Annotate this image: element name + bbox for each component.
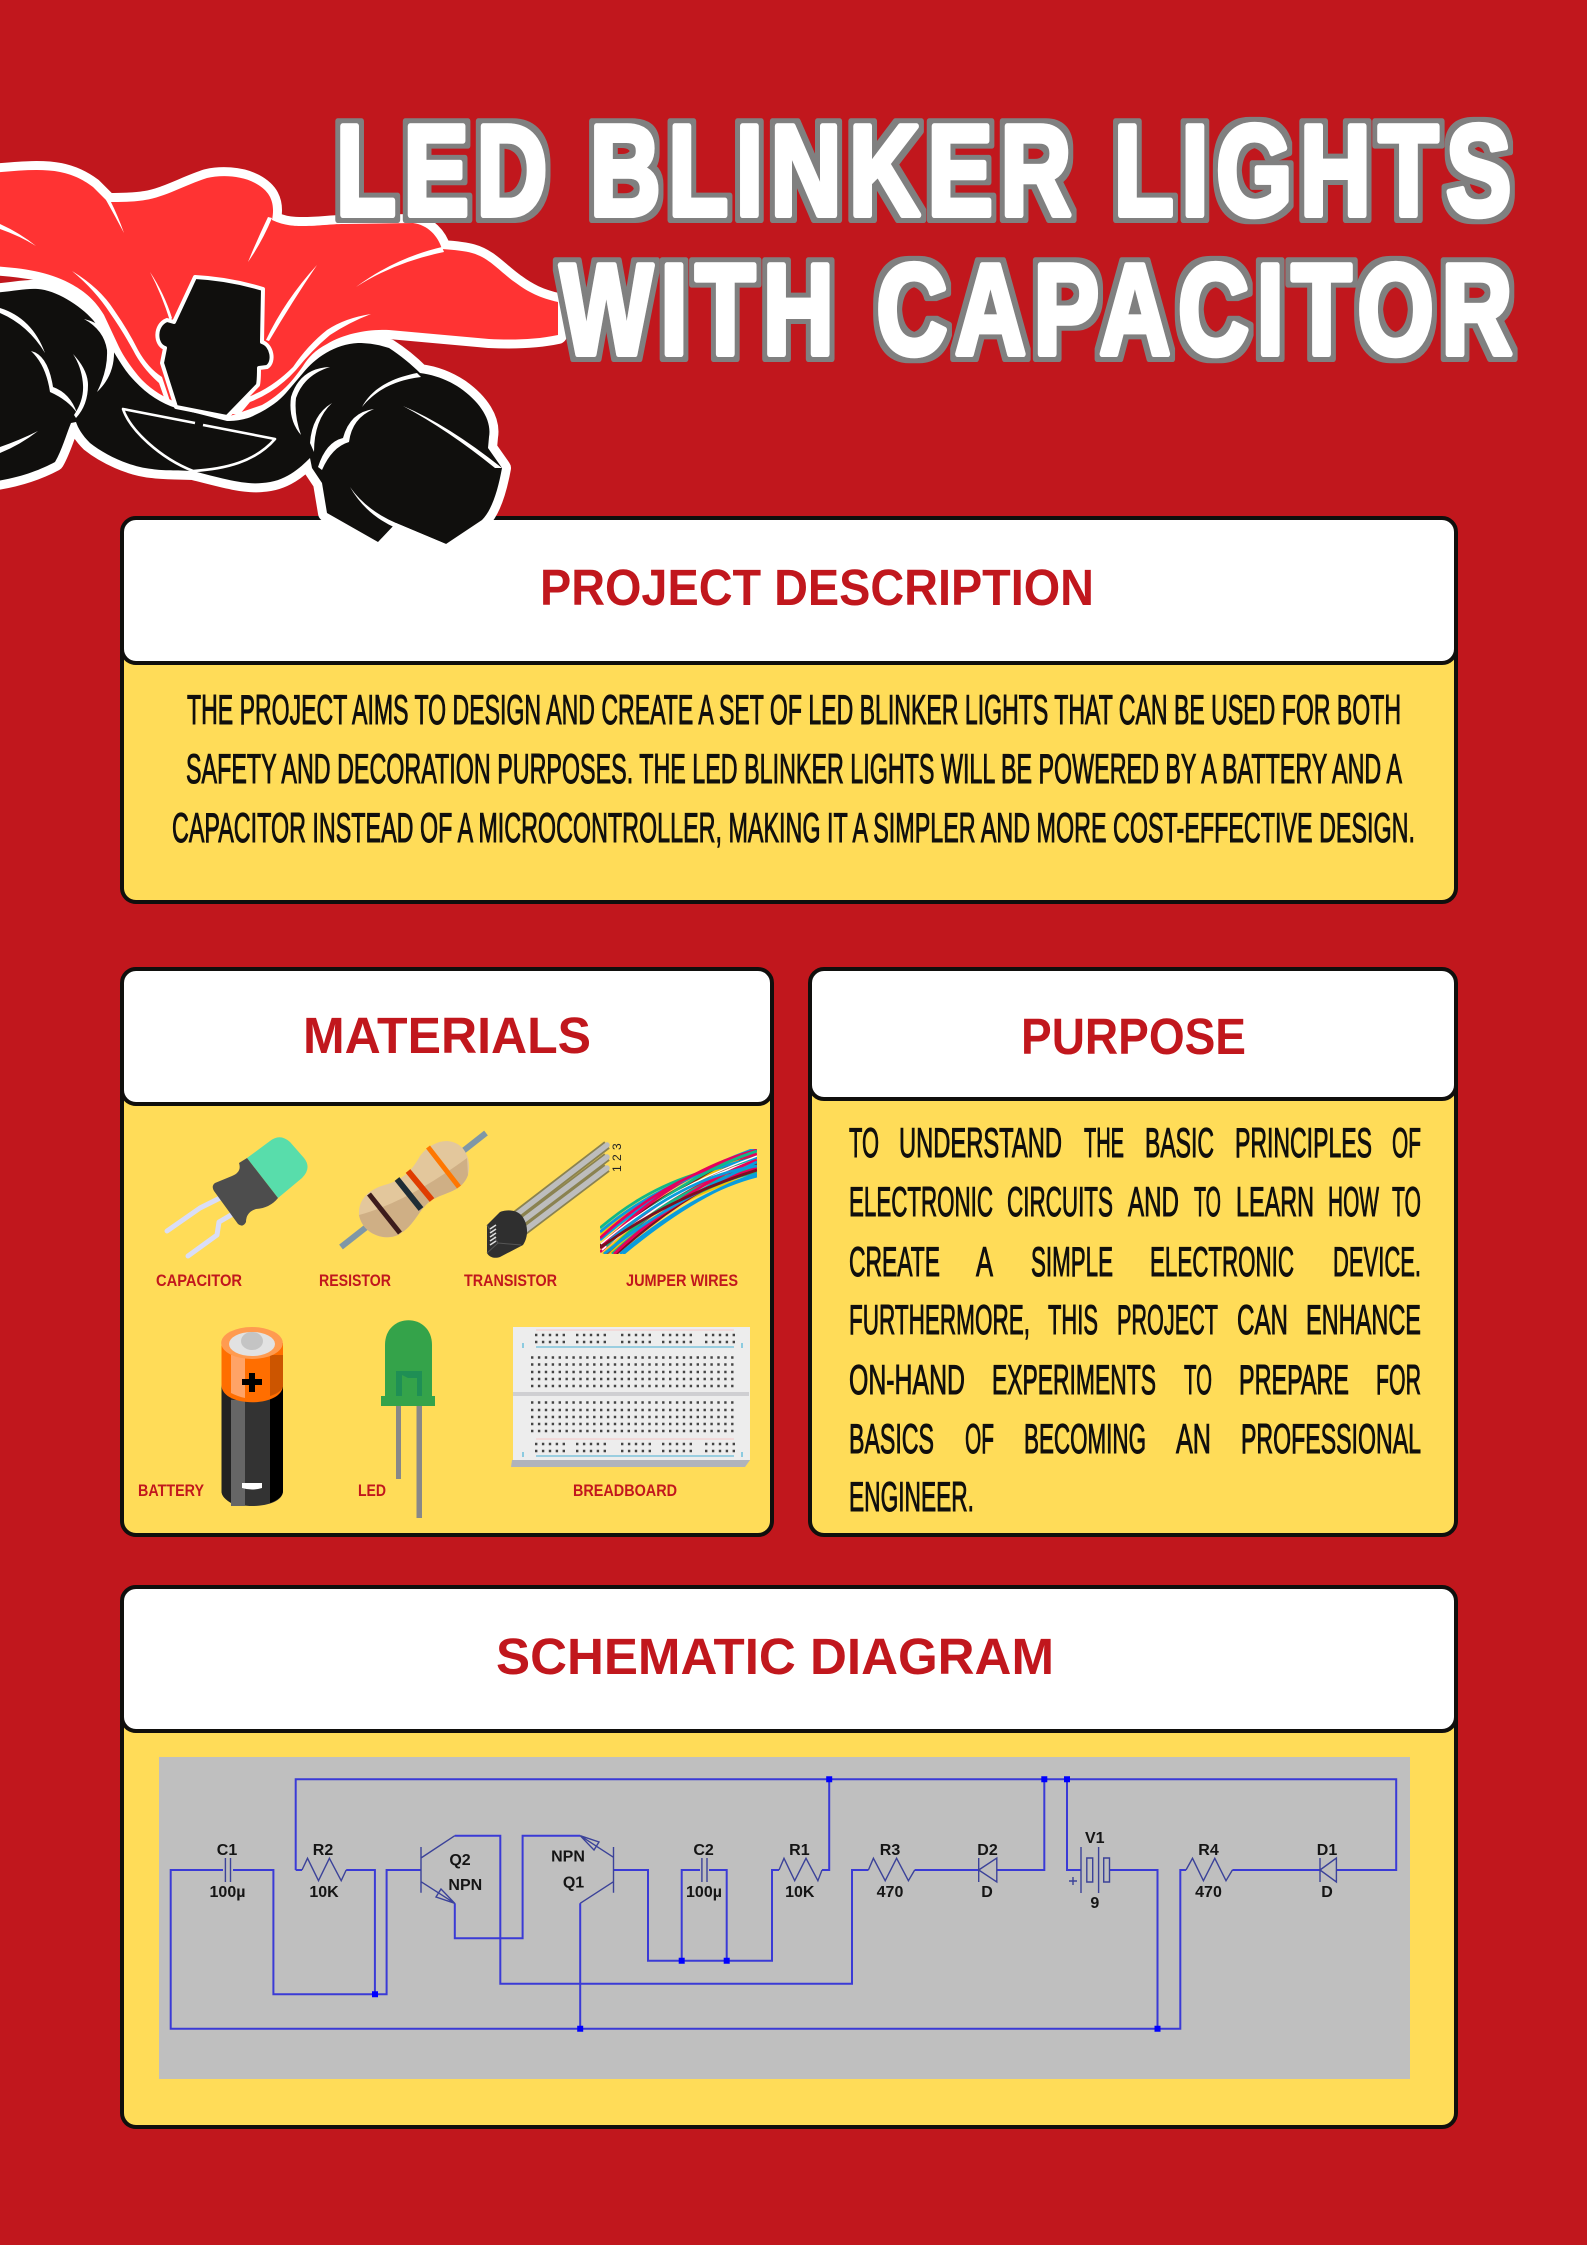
text block: purpose: PROJECT (1117, 1296, 1218, 1343)
text block: purpose (849, 1119, 1421, 1520)
text block: purpose: DEVICE. (1333, 1238, 1421, 1285)
icon: capacitor (167, 1137, 308, 1256)
chart: circuit schematic: 100µ (686, 1884, 722, 1901)
heading: project description: PROJECT DESCRIPTION (540, 559, 1094, 616)
text block: purpose: PRINCIPLES (1235, 1119, 1372, 1166)
panel: purpose (810, 969, 1456, 1535)
icon: resistor (341, 1133, 486, 1247)
icon: breadboard (511, 1327, 750, 1467)
text block: purpose: TO (1184, 1356, 1212, 1403)
text block: purpose: TO (1194, 1178, 1221, 1225)
label: transistor: TRANSISTOR (464, 1271, 557, 1290)
text block: purpose: ENGINEER. (849, 1473, 974, 1520)
text block: purpose: ENHANCE (1306, 1296, 1421, 1343)
chart: circuit schematic: 470 (1195, 1884, 1222, 1901)
cape folds (0, 200, 444, 414)
text block: purpose: LEARN (1236, 1178, 1314, 1225)
text block: purpose: FURTHERMORE, (849, 1296, 1030, 1343)
chart: circuit schematic: R3 (880, 1842, 900, 1859)
text block: purpose: FOR (1376, 1356, 1421, 1403)
text block: purpose: OF (965, 1415, 994, 1462)
text block: purpose: PREPARE (1239, 1356, 1349, 1403)
chart: circuit schematic: Q1 (563, 1875, 584, 1892)
chart: circuit schematic: R4 (1198, 1842, 1219, 1859)
text block: purpose: AND (1128, 1178, 1179, 1225)
icon: transistor: 1 (610, 1165, 624, 1172)
icon: transistor: 2 (610, 1154, 624, 1161)
chart: circuit schematic: 10K (785, 1884, 815, 1901)
wires (171, 1779, 1396, 2029)
icon: jumper wires (600, 1148, 757, 1254)
heading: materials: MATERIALS (303, 1007, 591, 1064)
icon: transistor: 3 (610, 1143, 624, 1150)
chart: circuit schematic (159, 1757, 1410, 2079)
chart: circuit schematic: Q2 (449, 1852, 471, 1869)
text block: purpose: SIMPLE (1031, 1238, 1113, 1285)
chart: circuit schematic: R2 (313, 1842, 333, 1859)
chart: circuit schematic: D1 (1317, 1842, 1337, 1859)
text block: purpose: BASIC (1145, 1119, 1214, 1166)
text block: purpose: AN (1176, 1415, 1211, 1462)
chart: circuit schematic: 9 (1090, 1895, 1099, 1912)
label: capacitor: CAPACITOR (156, 1271, 242, 1290)
icon: LED (381, 1320, 435, 1518)
text block: purpose: HOW (1328, 1178, 1379, 1225)
label: jumper wires: JUMPER WIRES (626, 1271, 738, 1290)
cape outline (0, 170, 558, 416)
body (0, 289, 502, 544)
component labels: C1 (217, 1842, 237, 1859)
chart: circuit schematic: NPN (551, 1849, 585, 1866)
text block: purpose: A (976, 1238, 993, 1285)
text block: purpose: BASICS (849, 1415, 934, 1462)
text block: purpose: EXPERIMENTS (992, 1356, 1156, 1403)
chart: circuit schematic: 100µ (210, 1884, 245, 1901)
heading: purpose: PURPOSE (1021, 1008, 1246, 1065)
title (336, 99, 1520, 382)
chest lines (123, 409, 275, 471)
chart: circuit schematic: 10K (309, 1884, 339, 1901)
chart: circuit schematic: V1 (1085, 1830, 1105, 1847)
chart: circuit schematic: R1 (789, 1842, 810, 1859)
text block: purpose: BECOMING (1024, 1415, 1146, 1462)
text block: purpose: CIRCUITS (1007, 1178, 1113, 1225)
label: resistor: RESISTOR (319, 1271, 391, 1290)
panel: project description (122, 518, 1456, 902)
text block: purpose: CAN (1237, 1296, 1288, 1343)
text block: purpose: OF (1392, 1119, 1421, 1166)
label: battery: BATTERY (138, 1481, 205, 1500)
icon: transistor (487, 1143, 624, 1258)
chart: circuit schematic: 470 (877, 1884, 903, 1901)
text block: purpose: ELECTRONIC (1150, 1238, 1294, 1285)
text block: purpose: PROFESSIONAL (1241, 1415, 1421, 1462)
text block: purpose: UNDERSTAND (899, 1119, 1062, 1166)
text block: purpose: CREATE (849, 1238, 940, 1285)
cape (0, 170, 558, 416)
muscle lines (0, 308, 502, 546)
illustration: superhero (0, 170, 558, 546)
chart: circuit schematic: D2 (977, 1842, 998, 1859)
chart: circuit schematic: D (981, 1884, 993, 1901)
head (157, 277, 272, 417)
components (225, 1836, 1336, 1903)
icon: battery (221, 1327, 283, 1506)
junctions (372, 1776, 1160, 2032)
panel: materials (122, 969, 772, 1535)
text block: purpose: TO (849, 1119, 879, 1166)
text block: purpose: THIS (1048, 1296, 1098, 1343)
chart: circuit schematic: NPN (448, 1877, 482, 1894)
chart: circuit schematic: D (1321, 1884, 1333, 1901)
body outline (0, 289, 502, 544)
label: breadboard: BREADBOARD (573, 1481, 677, 1500)
panel: schematic diagram (122, 1587, 1456, 2127)
text block: description (172, 686, 1415, 851)
text block: purpose: THE (1084, 1119, 1124, 1166)
text block: purpose: ON-HAND (849, 1356, 965, 1403)
chart: circuit schematic: C2 (693, 1842, 714, 1859)
text block: purpose: TO (1392, 1178, 1421, 1225)
text block: purpose: ELECTRONIC (849, 1178, 993, 1225)
heading: schematic diagram: SCHEMATIC DIAGRAM (496, 1628, 1054, 1685)
label: LED: LED (358, 1481, 386, 1500)
